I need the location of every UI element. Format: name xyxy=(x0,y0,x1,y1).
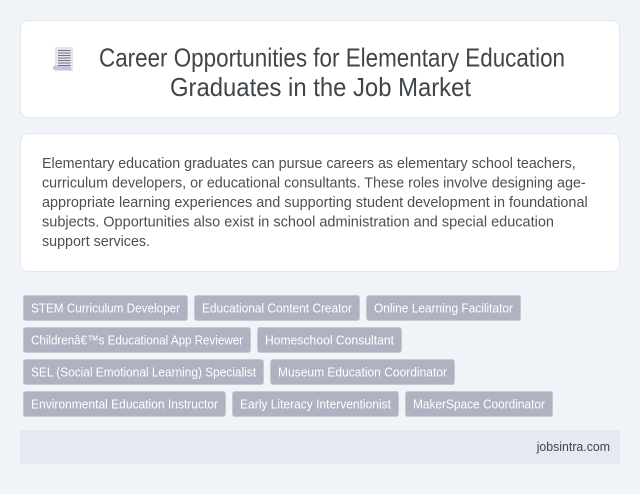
tag: Online Learning Facilitator xyxy=(366,296,520,320)
tag: Homeschool Consultant: Homeschool Consultant xyxy=(265,332,394,348)
tag: Educational Content Creator xyxy=(194,296,360,320)
description text: appropriate learning experiences and supporting student development in foundational xyxy=(42,195,588,211)
heading: Graduates in the Job Market xyxy=(170,74,471,102)
tag: MakerSpace Coordinator: MakerSpace Coordinator xyxy=(413,396,546,412)
tag: Museum Education Coordinator: Museum Education Coordinator xyxy=(278,364,448,380)
tag: STEM Curriculum Developer xyxy=(24,296,188,320)
tag: Environmental Education Instructor xyxy=(24,392,226,416)
tag: Early Literacy Interventionist xyxy=(232,392,398,416)
tag: Online Learning Facilitator: Online Learning Facilitator xyxy=(374,300,514,316)
tag: Early Literacy Interventionist: Early Literacy Interventionist xyxy=(240,396,391,412)
tag: Educational Content Creator: Educational Content Creator xyxy=(202,300,353,316)
tag: Museum Education Coordinator xyxy=(270,360,454,384)
tag: STEM Curriculum Developer: STEM Curriculum Developer xyxy=(31,300,181,316)
heading xyxy=(99,44,565,102)
tag list xyxy=(24,296,552,416)
description text: curriculum developers, or educational consultants. These roles involve designing age- xyxy=(42,176,586,192)
tag: MakerSpace Coordinator xyxy=(406,392,552,416)
footer xyxy=(20,430,620,464)
description panel xyxy=(20,134,620,272)
tag: Children's Educational App Reviewer xyxy=(24,328,250,352)
description text: subjects. Opportunities also exist in school administration and special education xyxy=(42,214,554,230)
title panel xyxy=(20,20,620,118)
tag: SEL Specialist xyxy=(24,360,264,384)
heading: Career Opportunities for Elementary Education xyxy=(99,44,565,72)
tag: Children's Educational App Reviewer: Childrenâ€™s Educational App Reviewer xyxy=(31,332,244,348)
tag: Homeschool Consultant xyxy=(258,328,402,352)
footer source text: jobsintra.com xyxy=(536,439,610,454)
description text xyxy=(42,156,588,250)
icon: document scroll xyxy=(53,47,73,70)
tag: SEL Specialist: SEL (Social Emotional Learning) Specialist xyxy=(31,364,256,380)
description text: support services. xyxy=(42,234,150,250)
description text: Elementary education graduates can pursue careers as elementary school teachers, xyxy=(42,156,576,172)
tag: Environmental Education Instructor: Environmental Education Instructor xyxy=(31,396,219,412)
